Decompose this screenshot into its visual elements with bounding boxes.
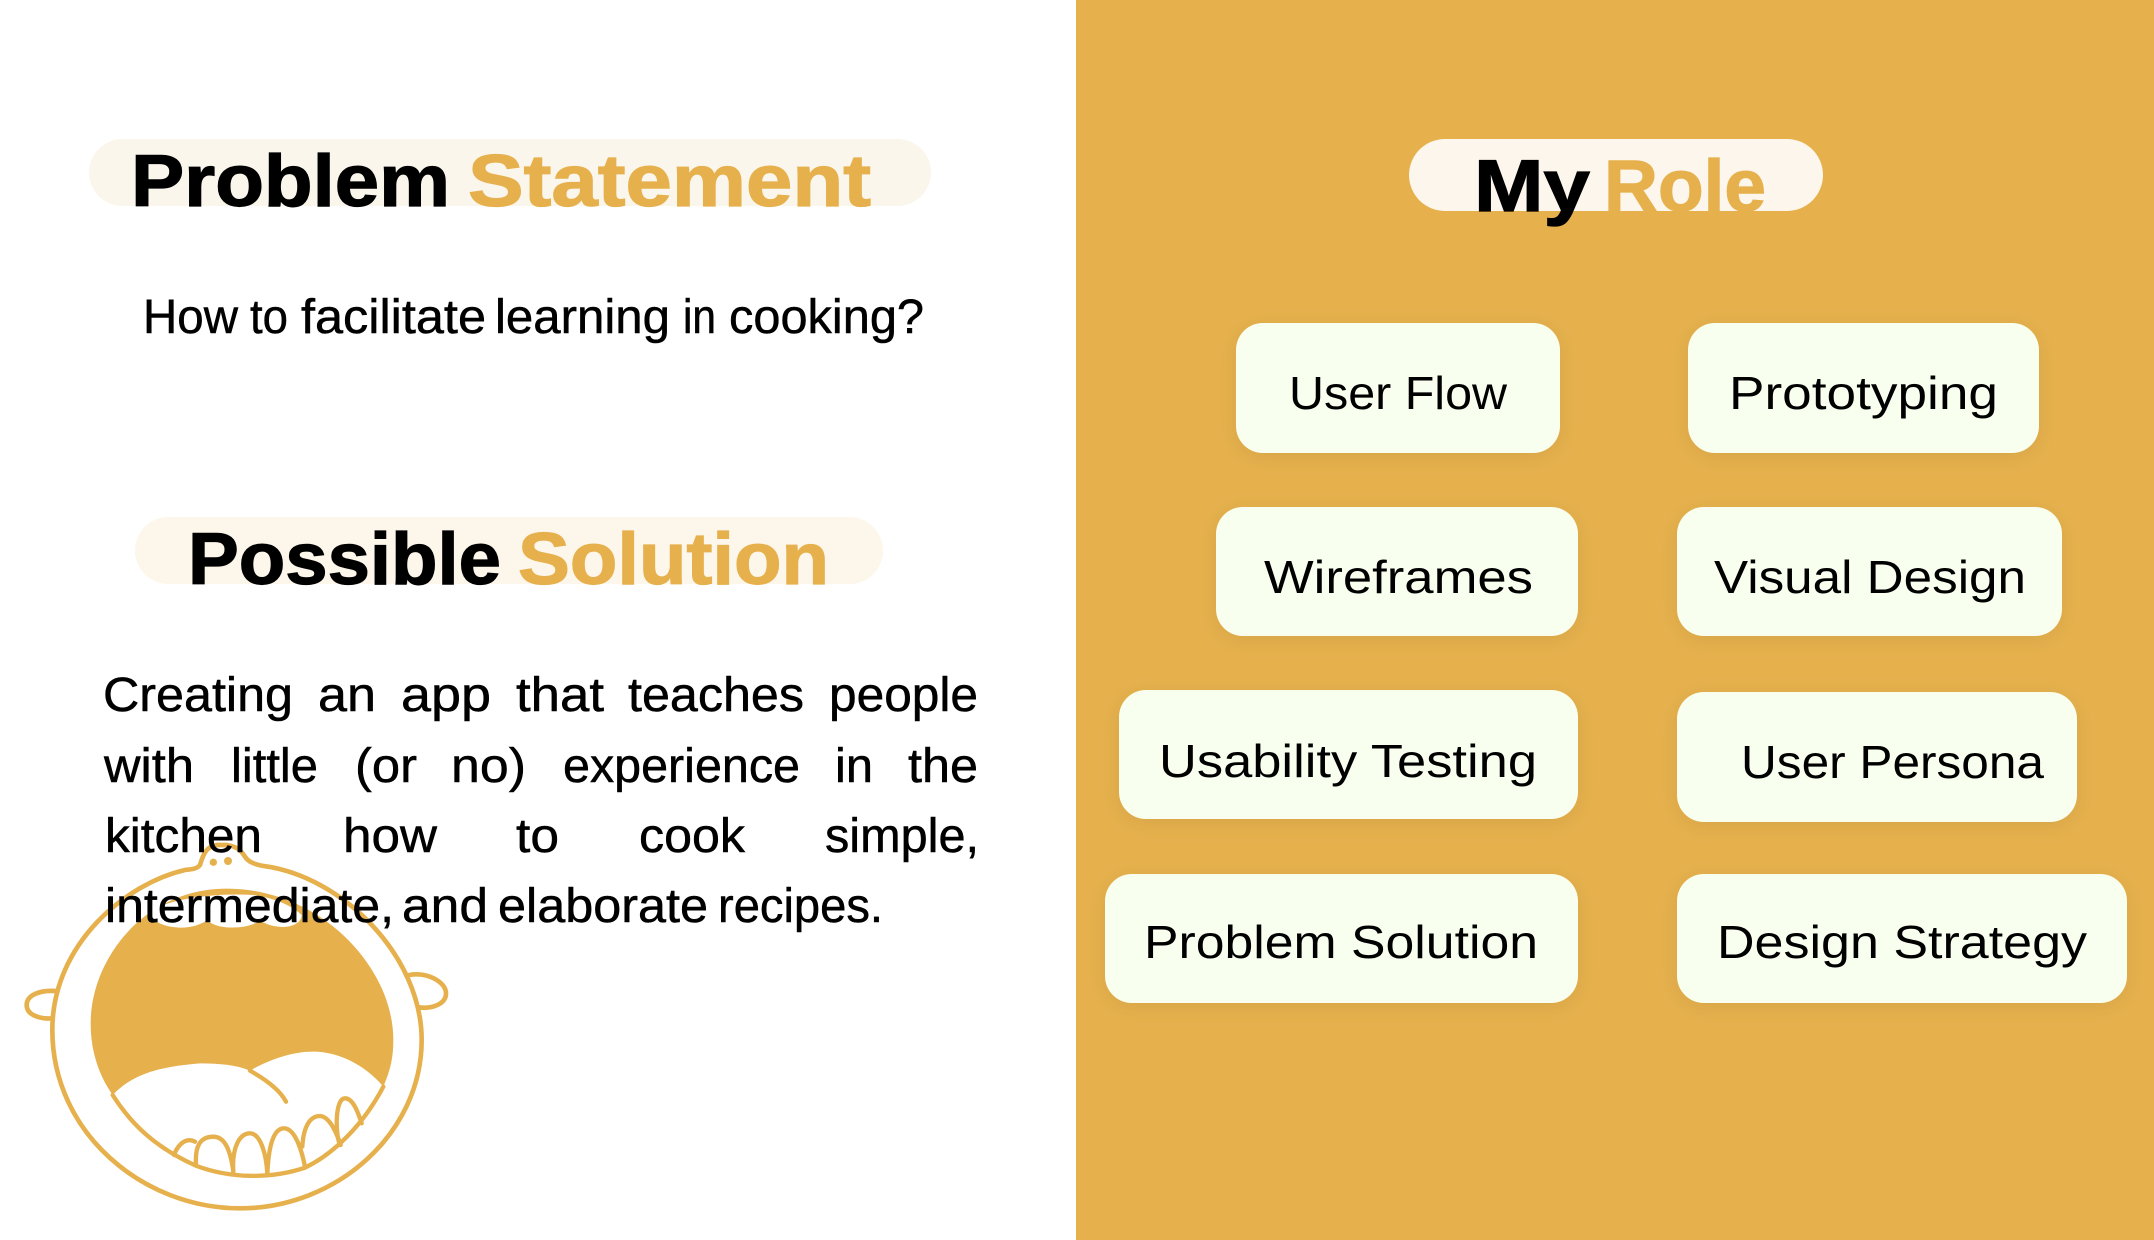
nostrils: [210, 857, 232, 866]
text: solution paragraph: elaborate: [498, 880, 708, 933]
text: solution paragraph: kitchen: [105, 810, 262, 863]
text: solution paragraph: experience: [563, 740, 800, 793]
text: problem question: in: [683, 291, 716, 344]
text: solution paragraph: teaches: [628, 669, 804, 722]
face outline with nose and ears: [27, 845, 446, 1208]
role tag: Visual Design: [1677, 507, 2062, 636]
role tag: Usability Testing: Usability Testing: [1159, 735, 1537, 787]
panel: right gold background: [1076, 0, 2154, 1240]
text: solution paragraph: little: [231, 740, 318, 793]
text: solution paragraph: cook: [639, 810, 746, 863]
role tag: User Persona: [1677, 692, 2077, 822]
heading: Problem Statement: Statement: [468, 141, 871, 222]
heading: My Role: [1409, 139, 1823, 227]
heading: My Role: Role: [1604, 146, 1766, 227]
role tag: Design Strategy: [1677, 874, 2127, 1003]
text: problem question: How: [143, 291, 238, 344]
text: solution paragraph: to: [516, 810, 559, 863]
role tag: Wireframes: Wireframes: [1264, 551, 1533, 603]
heading: Problem Statement: [89, 139, 931, 222]
mouth interior: [91, 889, 393, 1176]
text: solution paragraph: (or: [355, 740, 417, 793]
text: solution paragraph: with: [103, 740, 194, 793]
text: solution paragraph: how: [343, 810, 437, 863]
text: solution paragraph: intermediate,: [105, 880, 394, 933]
text: solution paragraph: people: [829, 669, 978, 722]
role tag: User Persona: User Persona: [1741, 736, 2044, 788]
text: solution paragraph: no): [451, 740, 526, 793]
text: problem question: to: [250, 291, 288, 344]
tongue: [113, 1052, 383, 1176]
text: solution paragraph: Creating: [103, 669, 293, 722]
role tag: Problem Solution: Problem Solution: [1144, 916, 1538, 968]
role tag: Prototyping: [1688, 323, 2039, 453]
text: problem question: facilitate: [301, 291, 486, 344]
role tag: Design Strategy: Design Strategy: [1717, 916, 2087, 968]
text: solution paragraph: and: [402, 880, 488, 933]
text: solution paragraph: simple,: [825, 810, 979, 863]
role tag: User Flow: [1236, 323, 1560, 453]
tongue crease, lower lip edge and lower teeth: [113, 1071, 383, 1176]
text: solution paragraph: the: [908, 740, 978, 793]
text: problem question: cooking?: [729, 291, 924, 344]
text: solution paragraph: [103, 669, 979, 933]
text: solution paragraph: that: [516, 669, 604, 722]
heading: Possible Solution: Possible: [188, 519, 501, 600]
text: problem question: learning: [495, 291, 670, 344]
illustration: open mouth face: [27, 845, 446, 1208]
role tag: User Flow: User Flow: [1289, 367, 1508, 419]
upper teeth: [147, 894, 302, 928]
role tag: Usability Testing: [1119, 690, 1578, 819]
text: solution paragraph: recipes.: [718, 880, 883, 933]
heading: Possible Solution: [135, 517, 883, 600]
heading: Problem Statement: Problem: [131, 141, 450, 222]
role tag: Problem Solution: [1105, 874, 1578, 1003]
text: solution paragraph: an: [318, 669, 376, 722]
heading: Possible Solution: Solution: [518, 519, 829, 600]
text: solution paragraph: in: [835, 740, 873, 793]
role tag: Visual Design: Visual Design: [1714, 551, 2026, 603]
role tag: Prototyping: Prototyping: [1729, 367, 1998, 419]
heading: My Role: My: [1474, 146, 1590, 227]
role tag: Wireframes: [1216, 507, 1578, 636]
text: solution paragraph: app: [401, 669, 491, 722]
